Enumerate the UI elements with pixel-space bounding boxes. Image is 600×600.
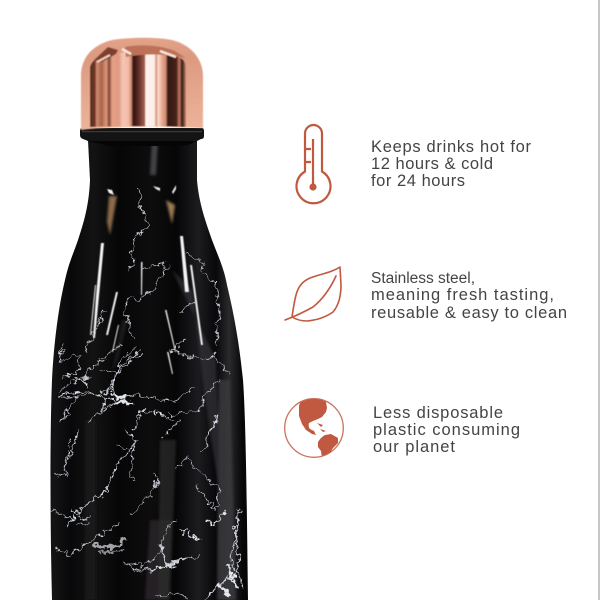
bottle body bbox=[40, 135, 260, 600]
feature: leaf bbox=[285, 267, 567, 322]
text: stainless steel: Stainless steel, bbox=[371, 270, 475, 287]
feature: globe bbox=[285, 398, 520, 458]
text: stainless steel bbox=[371, 270, 567, 322]
text: stainless steel: reusable & easy to clean bbox=[371, 304, 567, 322]
text: less plastic bbox=[373, 404, 520, 456]
cap ring bbox=[80, 128, 204, 141]
glossy reflections bbox=[85, 140, 236, 600]
text: less plastic: plastic consuming bbox=[373, 421, 520, 439]
text: less plastic: our planet bbox=[373, 438, 455, 456]
rose gold cap bbox=[81, 38, 203, 130]
feature: thermometer bbox=[296, 125, 532, 203]
marble speckle clusters bbox=[60, 345, 238, 595]
text: hot and cold: for 24 hours bbox=[371, 172, 465, 190]
icon: leaf bbox=[285, 267, 341, 321]
icon: globe bbox=[285, 398, 343, 458]
bottle bbox=[40, 38, 260, 600]
text: hot and cold: Keeps drinks hot for bbox=[371, 138, 532, 156]
text: hot and cold bbox=[371, 138, 532, 190]
right edge line bbox=[598, 0, 600, 600]
text: less plastic: Less disposable bbox=[373, 404, 503, 422]
text: stainless steel: meaning fresh tasting, bbox=[371, 286, 554, 304]
text: hot and cold: 12 hours & cold bbox=[371, 155, 493, 173]
white streak highlights bbox=[90, 185, 203, 374]
icon: thermometer bbox=[296, 125, 330, 203]
marble veins bbox=[50, 190, 245, 600]
